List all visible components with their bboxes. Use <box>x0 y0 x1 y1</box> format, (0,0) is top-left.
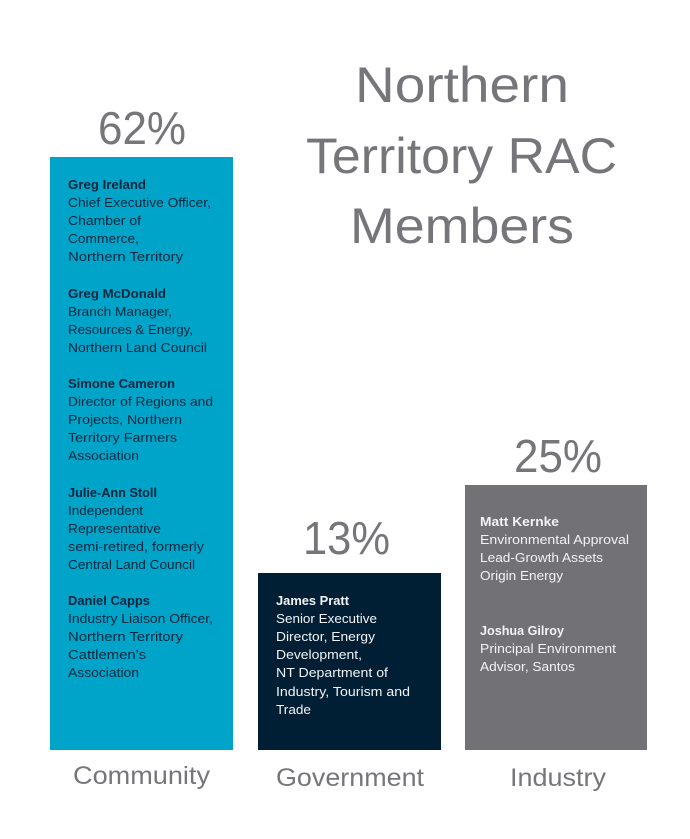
government members: Development, <box>276 647 362 662</box>
community members: Central Land Council <box>68 557 195 572</box>
government label: Government <box>276 764 424 792</box>
industry members: Joshua Gilroy <box>480 623 565 638</box>
community members: Director of Regions and <box>68 394 213 409</box>
community members: Association <box>68 448 139 463</box>
community members: Greg McDonald <box>68 286 166 301</box>
industry members: Advisor, Santos <box>480 659 576 674</box>
industry members <box>480 514 629 674</box>
community members <box>68 177 213 680</box>
community members: Resources & Energy, <box>68 322 193 337</box>
community members: Representative <box>68 521 161 536</box>
community members: Projects, Northern <box>68 412 182 427</box>
community members: Chamber of <box>68 213 141 228</box>
title: Members <box>350 198 574 254</box>
community members: Industry Liaison Officer, <box>68 611 213 626</box>
government percentage: 13% <box>303 512 390 564</box>
industry members: Environmental Approval <box>480 532 629 547</box>
title <box>306 57 617 254</box>
community bar <box>50 157 233 750</box>
panel: government <box>258 512 441 792</box>
community members: Territory Farmers <box>68 430 178 445</box>
community members: Northern Territory <box>68 629 184 644</box>
community members: Greg Ireland <box>68 177 146 192</box>
industry bar <box>465 485 647 750</box>
government members: Trade <box>276 702 311 717</box>
government members <box>276 593 410 717</box>
industry members: Origin Energy <box>480 568 564 583</box>
industry members: Matt Kernke <box>480 514 559 529</box>
community members: Association <box>68 665 139 680</box>
government members: James Pratt <box>276 593 350 608</box>
government bar <box>258 573 441 750</box>
community members: Chief Executive Officer, <box>68 195 211 210</box>
community members: Daniel Capps <box>68 593 150 608</box>
community members: Simone Cameron <box>68 376 175 391</box>
panel: community <box>50 102 233 790</box>
industry label: Industry <box>510 764 607 792</box>
title: Territory RAC <box>306 128 617 184</box>
community members: Northern Land Council <box>68 340 207 355</box>
industry members: Principal Environment <box>480 641 616 656</box>
government members: Industry, Tourism and <box>276 684 410 699</box>
community label: Community <box>73 762 211 790</box>
government members: Director, Energy <box>276 629 376 644</box>
industry members: Lead-Growth Assets <box>480 550 604 565</box>
government members: Senior Executive <box>276 611 377 626</box>
community members: Commerce, <box>68 231 139 246</box>
industry percentage: 25% <box>514 430 602 482</box>
community members: Julie-Ann Stoll <box>68 485 157 500</box>
community members: Independent <box>68 503 143 518</box>
title: Northern <box>355 57 569 113</box>
panel: industry <box>465 430 647 792</box>
government members: NT Department of <box>276 665 388 680</box>
community members: Northern Territory <box>68 249 184 264</box>
community members: Branch Manager, <box>68 304 172 319</box>
community percentage: 62% <box>98 102 186 154</box>
community members: Cattlemen’s <box>68 647 147 662</box>
community members: semi-retired, formerly <box>68 539 205 554</box>
